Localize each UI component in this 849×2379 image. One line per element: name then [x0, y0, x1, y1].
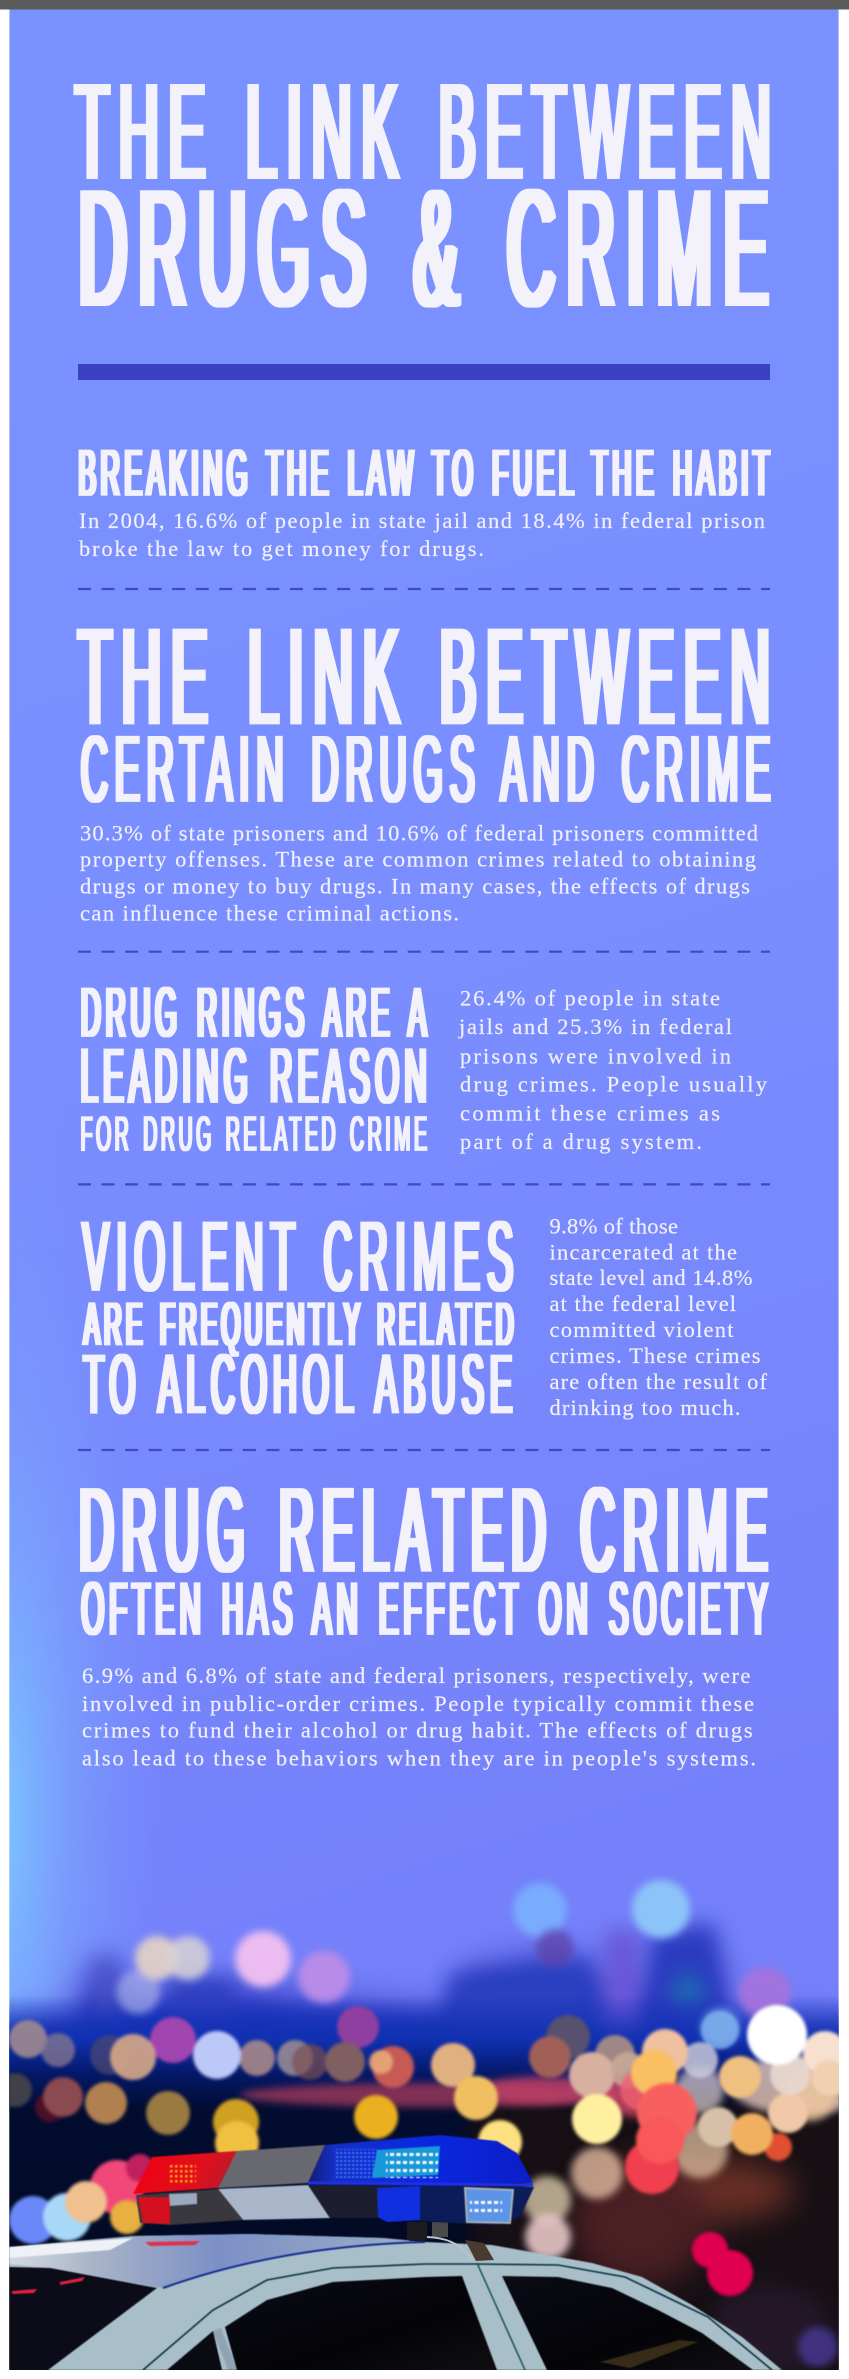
wiper strip	[213, 2328, 237, 2370]
body text: state level and 14.8%	[550, 1265, 752, 1290]
blurred skyline	[0, 1925, 849, 2379]
pinstripe	[143, 2264, 772, 2370]
amber LEDs	[168, 2163, 196, 2183]
section: certain drugs and crime	[78, 600, 780, 925]
section: effect on society	[79, 1462, 776, 1771]
title underline bar	[78, 364, 770, 380]
body text: commit these crimes as	[460, 1100, 720, 1126]
dark right foreground	[240, 2055, 849, 2379]
roof highlight	[9, 2238, 133, 2258]
section: breaking the law	[78, 436, 774, 561]
body text: committed violent	[550, 1317, 734, 1342]
base right shade	[420, 2186, 534, 2225]
label plate	[169, 2193, 197, 2206]
body text: involved in public-order crimes. People typically commit these	[82, 1691, 754, 1716]
window reflections	[12, 2277, 85, 2294]
body text: incarcerated at the	[550, 1239, 737, 1264]
body text	[550, 1213, 768, 1420]
blue band	[308, 2183, 533, 2185]
police car	[9, 2234, 782, 2370]
body text: prisons were involved in	[460, 1044, 731, 1068]
rear red light	[138, 2197, 170, 2224]
body text: are often the result of	[550, 1369, 768, 1394]
front light LEDs	[469, 2200, 503, 2213]
body text: can influence these criminal actions.	[80, 900, 459, 925]
silver panel lower	[218, 2185, 330, 2220]
teal LED glow	[372, 2146, 440, 2178]
heading	[80, 973, 432, 1162]
silver panel upper	[218, 2145, 325, 2188]
body text: 30.3% of state prisoners and 10.6% of federal prisoners committed	[80, 820, 758, 845]
body text	[82, 1663, 756, 1771]
front window	[502, 2276, 753, 2370]
body text: crimes. These crimes	[550, 1343, 760, 1368]
body text: In 2004, 16.6% of people in state jail and 18.4% in federal prison	[79, 508, 765, 533]
body text: also lead to these behaviors when they are in people's systems.	[82, 1746, 756, 1771]
body text: crimes to fund their alcohol or drug habit. The effects of drugs	[82, 1718, 753, 1743]
rear window	[9, 2267, 157, 2370]
body text: drugs or money to buy drugs. In many cases, the effects of drugs	[80, 874, 750, 898]
bokeh: crisp lights	[0, 2005, 848, 2296]
body text: part of a drug system.	[460, 1129, 702, 1154]
body text: broke the law to get money for drugs.	[79, 536, 484, 561]
blue LEDs	[335, 2149, 377, 2179]
roof mount and wire	[407, 2222, 494, 2262]
blue dome	[308, 2135, 533, 2183]
bokeh: soft lights	[116, 1880, 838, 2367]
police light bar	[133, 2135, 534, 2225]
roof reflection	[145, 2241, 200, 2246]
white LEDs	[386, 2148, 438, 2178]
white front light	[465, 2188, 513, 2223]
section: violent crimes	[82, 1201, 768, 1431]
side window	[225, 2276, 497, 2370]
window reflection	[600, 2340, 698, 2368]
body text	[79, 508, 765, 561]
photo: police car at night with city bokeh	[0, 1880, 849, 2379]
body text: drinking too much.	[550, 1395, 740, 1420]
body text: 9.8% of those	[550, 1213, 678, 1238]
door line	[477, 2263, 525, 2370]
title	[75, 56, 781, 342]
blue box light	[377, 2186, 420, 2222]
roof surface	[9, 2234, 425, 2288]
car body	[9, 2234, 782, 2370]
body text	[458, 986, 768, 1154]
base right	[309, 2185, 420, 2221]
body text: at the federal level	[550, 1291, 736, 1316]
base left	[136, 2189, 243, 2225]
section: drug rings	[80, 973, 768, 1162]
body text: 6.9% and 6.8% of state and federal prisoners, respectively, were	[82, 1663, 750, 1688]
body text: property offenses. These are common crimes related to obtaining	[80, 847, 756, 872]
roof line	[163, 2242, 425, 2288]
body text: jails and 25.3% in federal	[458, 1014, 732, 1039]
body text: 26.4% of people in state	[460, 986, 720, 1011]
body text	[80, 820, 758, 925]
body text: drug crimes. People usually	[460, 1071, 768, 1096]
red dome	[133, 2151, 237, 2194]
side window rear quarter	[167, 2331, 222, 2370]
top bar	[0, 0, 849, 10]
heading	[82, 1201, 520, 1431]
